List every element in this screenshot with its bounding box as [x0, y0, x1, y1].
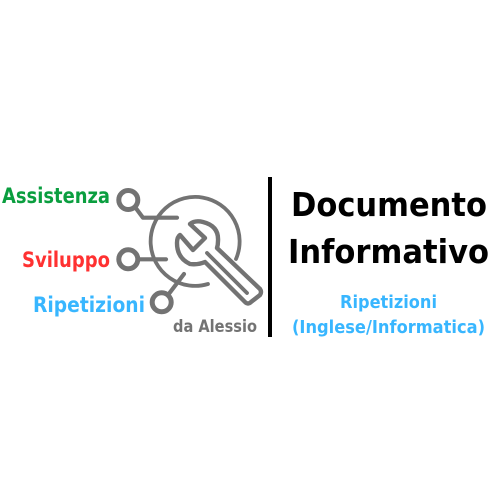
node: top — [119, 190, 177, 218]
label: Ripetizioni: Ripetizioni — [33, 293, 145, 318]
icon: circuit magnifier with wrench — [119, 190, 261, 312]
label: da Alessio: da Alessio — [173, 317, 257, 336]
subtitle: Ripetizioni: Ripetizioni — [340, 292, 437, 313]
icon: wrench — [177, 221, 261, 304]
node: middle — [119, 250, 166, 269]
big circle arc — [151, 197, 240, 286]
title: Informativo: Informativo — [288, 232, 489, 271]
title: Documento: Documento — [291, 185, 487, 224]
node: bottom — [152, 274, 184, 312]
label: Sviluppo: Sviluppo — [22, 248, 110, 273]
label: Assistenza: Assistenza — [2, 184, 110, 209]
vertical divider — [268, 177, 272, 337]
subtitle: Inglese/Informatica: (Inglese/Informatica) — [292, 317, 485, 338]
